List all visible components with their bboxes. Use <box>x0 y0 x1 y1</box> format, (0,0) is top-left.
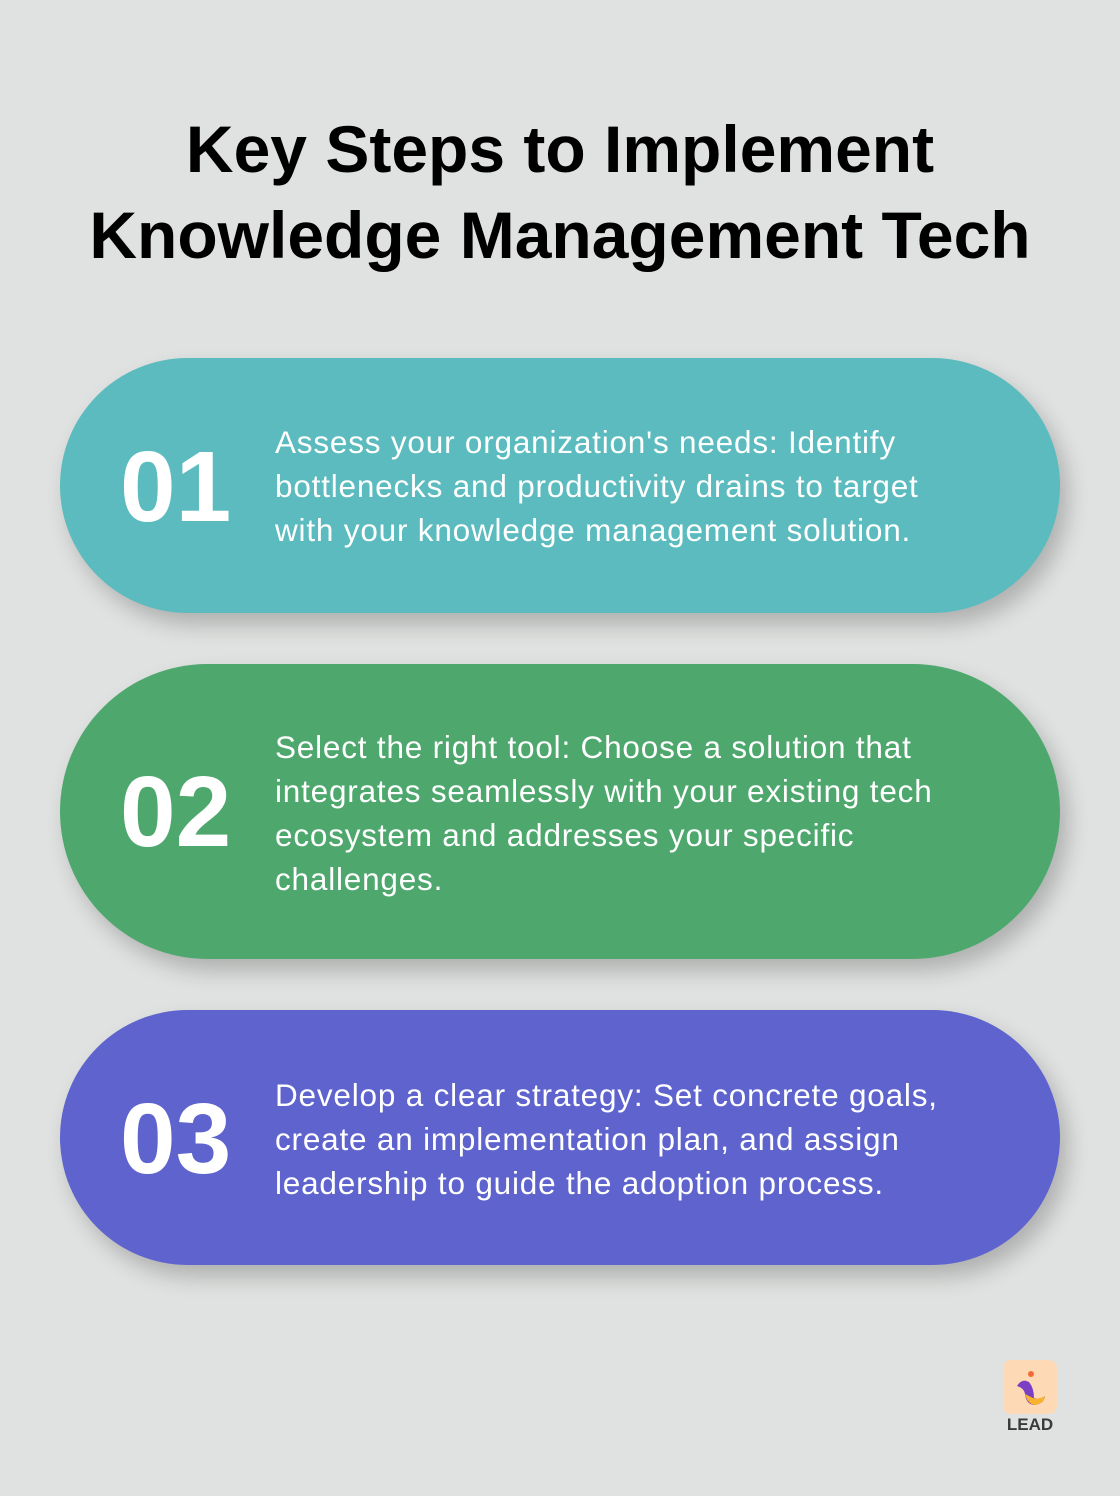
number 01: 01 <box>120 431 231 543</box>
icon: logo mark <box>1003 1360 1057 1414</box>
logo text: LEAD <box>1007 1415 1053 1434</box>
title <box>89 112 1031 272</box>
panel: step 1 <box>60 358 1060 613</box>
text step 2: Select the right tool: Choose a solution that integrates seamlessly with your existing tech ecosystem and addresses your specific challenges. <box>275 729 933 897</box>
panel: step 3 <box>60 1010 1060 1265</box>
title: Key Steps to Implement <box>186 112 934 186</box>
text step 1: Assess your organization's needs: Identify bottlenecks and productivity drains to target with your knowledge management solution. <box>275 424 919 548</box>
number 03: 03 <box>120 1083 231 1195</box>
text step 3: Develop a clear strategy: Set concrete goals, create an implementation plan, and assign leadership to guide the adoption process. <box>275 1077 938 1201</box>
number 02: 02 <box>120 756 231 868</box>
title: Knowledge Management Tech <box>89 198 1031 272</box>
logo <box>1003 1360 1057 1434</box>
panel: step 2 <box>60 664 1060 959</box>
